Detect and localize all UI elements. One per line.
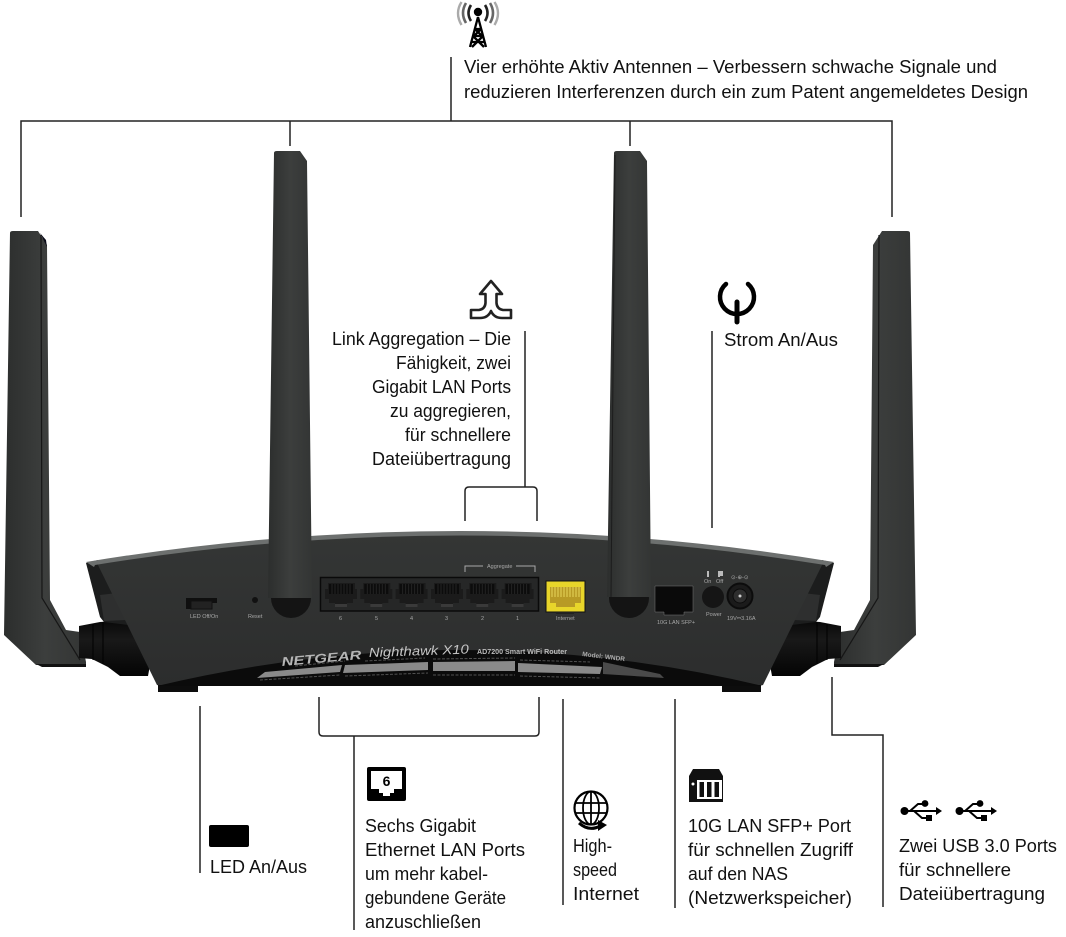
router [4, 151, 916, 692]
text: USB ports [899, 836, 1057, 904]
aggregate marker: Aggregate [487, 564, 512, 570]
right cylinder hinge [770, 620, 841, 676]
text: active antennas: Vier erhöhte Aktiv Antennen – Verbessern schwache Signale und [464, 57, 997, 77]
text: six gigabit ports [365, 816, 525, 932]
icon: six LAN ports: 6 [383, 773, 391, 789]
power jack: 19V⎓3.16A [727, 616, 756, 622]
text: six gigabit ports: um mehr kabel- [365, 864, 488, 884]
bracket: LAN ports leader [319, 697, 539, 930]
text: six gigabit ports: gebundene Geräte [365, 888, 506, 908]
icon: NAS [689, 769, 723, 802]
text: SFP port: für schnellen Zugriff [688, 840, 854, 860]
left inner antenna [268, 151, 312, 618]
text: high-speed internet: Internet [573, 884, 639, 904]
icon: USB symbols [900, 800, 997, 821]
SFP port [655, 586, 695, 626]
text: SFP port: 10G LAN SFP+ Port [688, 816, 851, 836]
label band: AD7200 Smart WiFi Router [477, 649, 567, 656]
left cylinder hinge [79, 620, 150, 676]
icon: antenna tower [458, 2, 498, 47]
LED switch [186, 598, 218, 620]
leader: USB [832, 677, 883, 907]
text: SFP port: auf den NAS [688, 864, 788, 884]
text: active antennas [464, 57, 1028, 102]
reset button [248, 597, 263, 620]
icon: globe [574, 792, 608, 831]
icon: six LAN ports [367, 767, 406, 801]
power jack [727, 575, 756, 622]
text: link aggregation: Fähigkeit, zwei [396, 353, 511, 373]
LAN port panel: 5 [375, 616, 378, 622]
leader: SFP [674, 699, 676, 908]
router body [86, 531, 834, 685]
text: high-speed internet: High- [573, 836, 612, 856]
text: high-speed internet [573, 836, 639, 904]
leader: power [711, 331, 713, 528]
text: SFP port: (Netzwerkspeicher) [688, 888, 852, 908]
bracket: antenna leader lines [21, 57, 892, 217]
icon: link aggregation [471, 281, 511, 318]
power button [702, 571, 724, 618]
reset button: Reset [248, 614, 263, 620]
bracket: aggregate ports leader [465, 331, 537, 521]
leader: LED [199, 706, 201, 873]
icon: power [720, 284, 754, 322]
SFP port: 10G LAN SFP+ [657, 620, 695, 626]
text: link aggregation: Dateiübertragung [372, 449, 511, 469]
LAN port panel: 1 [516, 616, 519, 622]
LAN port panel [320, 578, 538, 622]
power jack: ⊙-⊕-⊙ [731, 575, 749, 581]
icon: LED switch [209, 825, 249, 847]
label band [157, 641, 763, 686]
aggregate marker [465, 564, 535, 572]
text: link aggregation: zu aggregieren, [390, 401, 511, 421]
LAN port panel: 3 [445, 616, 448, 622]
text: link aggregation [332, 329, 511, 469]
text: link aggregation: für schnellere [405, 425, 511, 445]
right inner antenna [607, 151, 651, 618]
router side pieces [86, 560, 834, 625]
text: power on/off: Strom An/Aus [724, 330, 838, 350]
text: LED: LED An/Aus [210, 857, 307, 877]
right outer antenna [834, 231, 916, 667]
left outer antenna [4, 231, 86, 667]
text: six gigabit ports: Ethernet LAN Ports [365, 840, 525, 860]
text: high-speed internet: speed [573, 860, 617, 880]
text: SFP port [688, 816, 854, 908]
text: six gigabit ports: anzuschließen [365, 912, 481, 932]
yellow internet port: Internet [556, 616, 575, 622]
label band: Nighthawk X10 [369, 641, 470, 660]
yellow internet port [546, 581, 585, 622]
text: USB ports: für schnellere [899, 860, 1011, 880]
label band: NETGEAR [281, 648, 362, 669]
LED switch: LED Off/On [190, 614, 218, 620]
text: link aggregation: Link Aggregation – Die [332, 329, 511, 349]
LAN port panel: 2 [481, 616, 484, 622]
router feet [158, 683, 761, 692]
text: link aggregation: Gigabit LAN Ports [372, 377, 511, 397]
LAN port panel: 6 [339, 616, 342, 622]
text: USB ports: Zwei USB 3.0 Ports [899, 836, 1057, 856]
text: active antennas: reduzieren Interferenzen durch ein zum Patent angemeldetes Design [464, 82, 1028, 102]
text: six gigabit ports: Sechs Gigabit [365, 816, 476, 836]
LAN port panel: 4 [410, 616, 413, 622]
leader: internet [562, 699, 564, 905]
label band: Model: WNDR [582, 651, 626, 663]
power button: Off [716, 579, 724, 585]
power button: On [704, 579, 711, 585]
power button: Power [706, 612, 722, 618]
text: USB ports: Dateiübertragung [899, 884, 1045, 904]
